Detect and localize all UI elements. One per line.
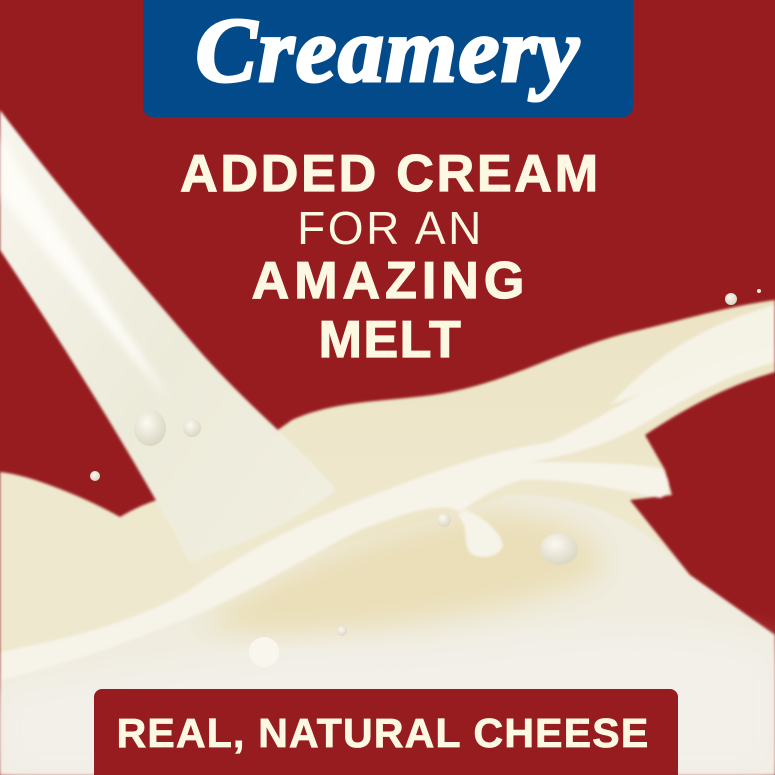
headline line 4: MELT — [319, 311, 462, 369]
headline — [180, 145, 601, 369]
white foreground swell — [0, 630, 775, 775]
headline line 1: ADDED CREAM — [180, 145, 601, 203]
bottom banner text: REAL, NATURAL CHEESE — [117, 710, 649, 756]
pour stream — [0, 110, 336, 562]
brand banner — [143, 0, 633, 117]
brand name: Creamery — [195, 0, 581, 101]
ribbon drip — [458, 510, 503, 557]
back splash wave — [0, 300, 775, 775]
stream highlight — [0, 135, 170, 400]
golden mid-tone — [200, 510, 602, 635]
bottom banner — [94, 689, 678, 775]
headline line 2: FOR AN — [297, 202, 484, 254]
left cream mound — [0, 472, 210, 655]
headline line 3: AMAZING — [252, 252, 529, 310]
upper splash crest — [610, 305, 775, 405]
lower pool — [0, 495, 775, 775]
front splash ribbon — [0, 345, 775, 680]
milk droplets — [90, 289, 761, 667]
